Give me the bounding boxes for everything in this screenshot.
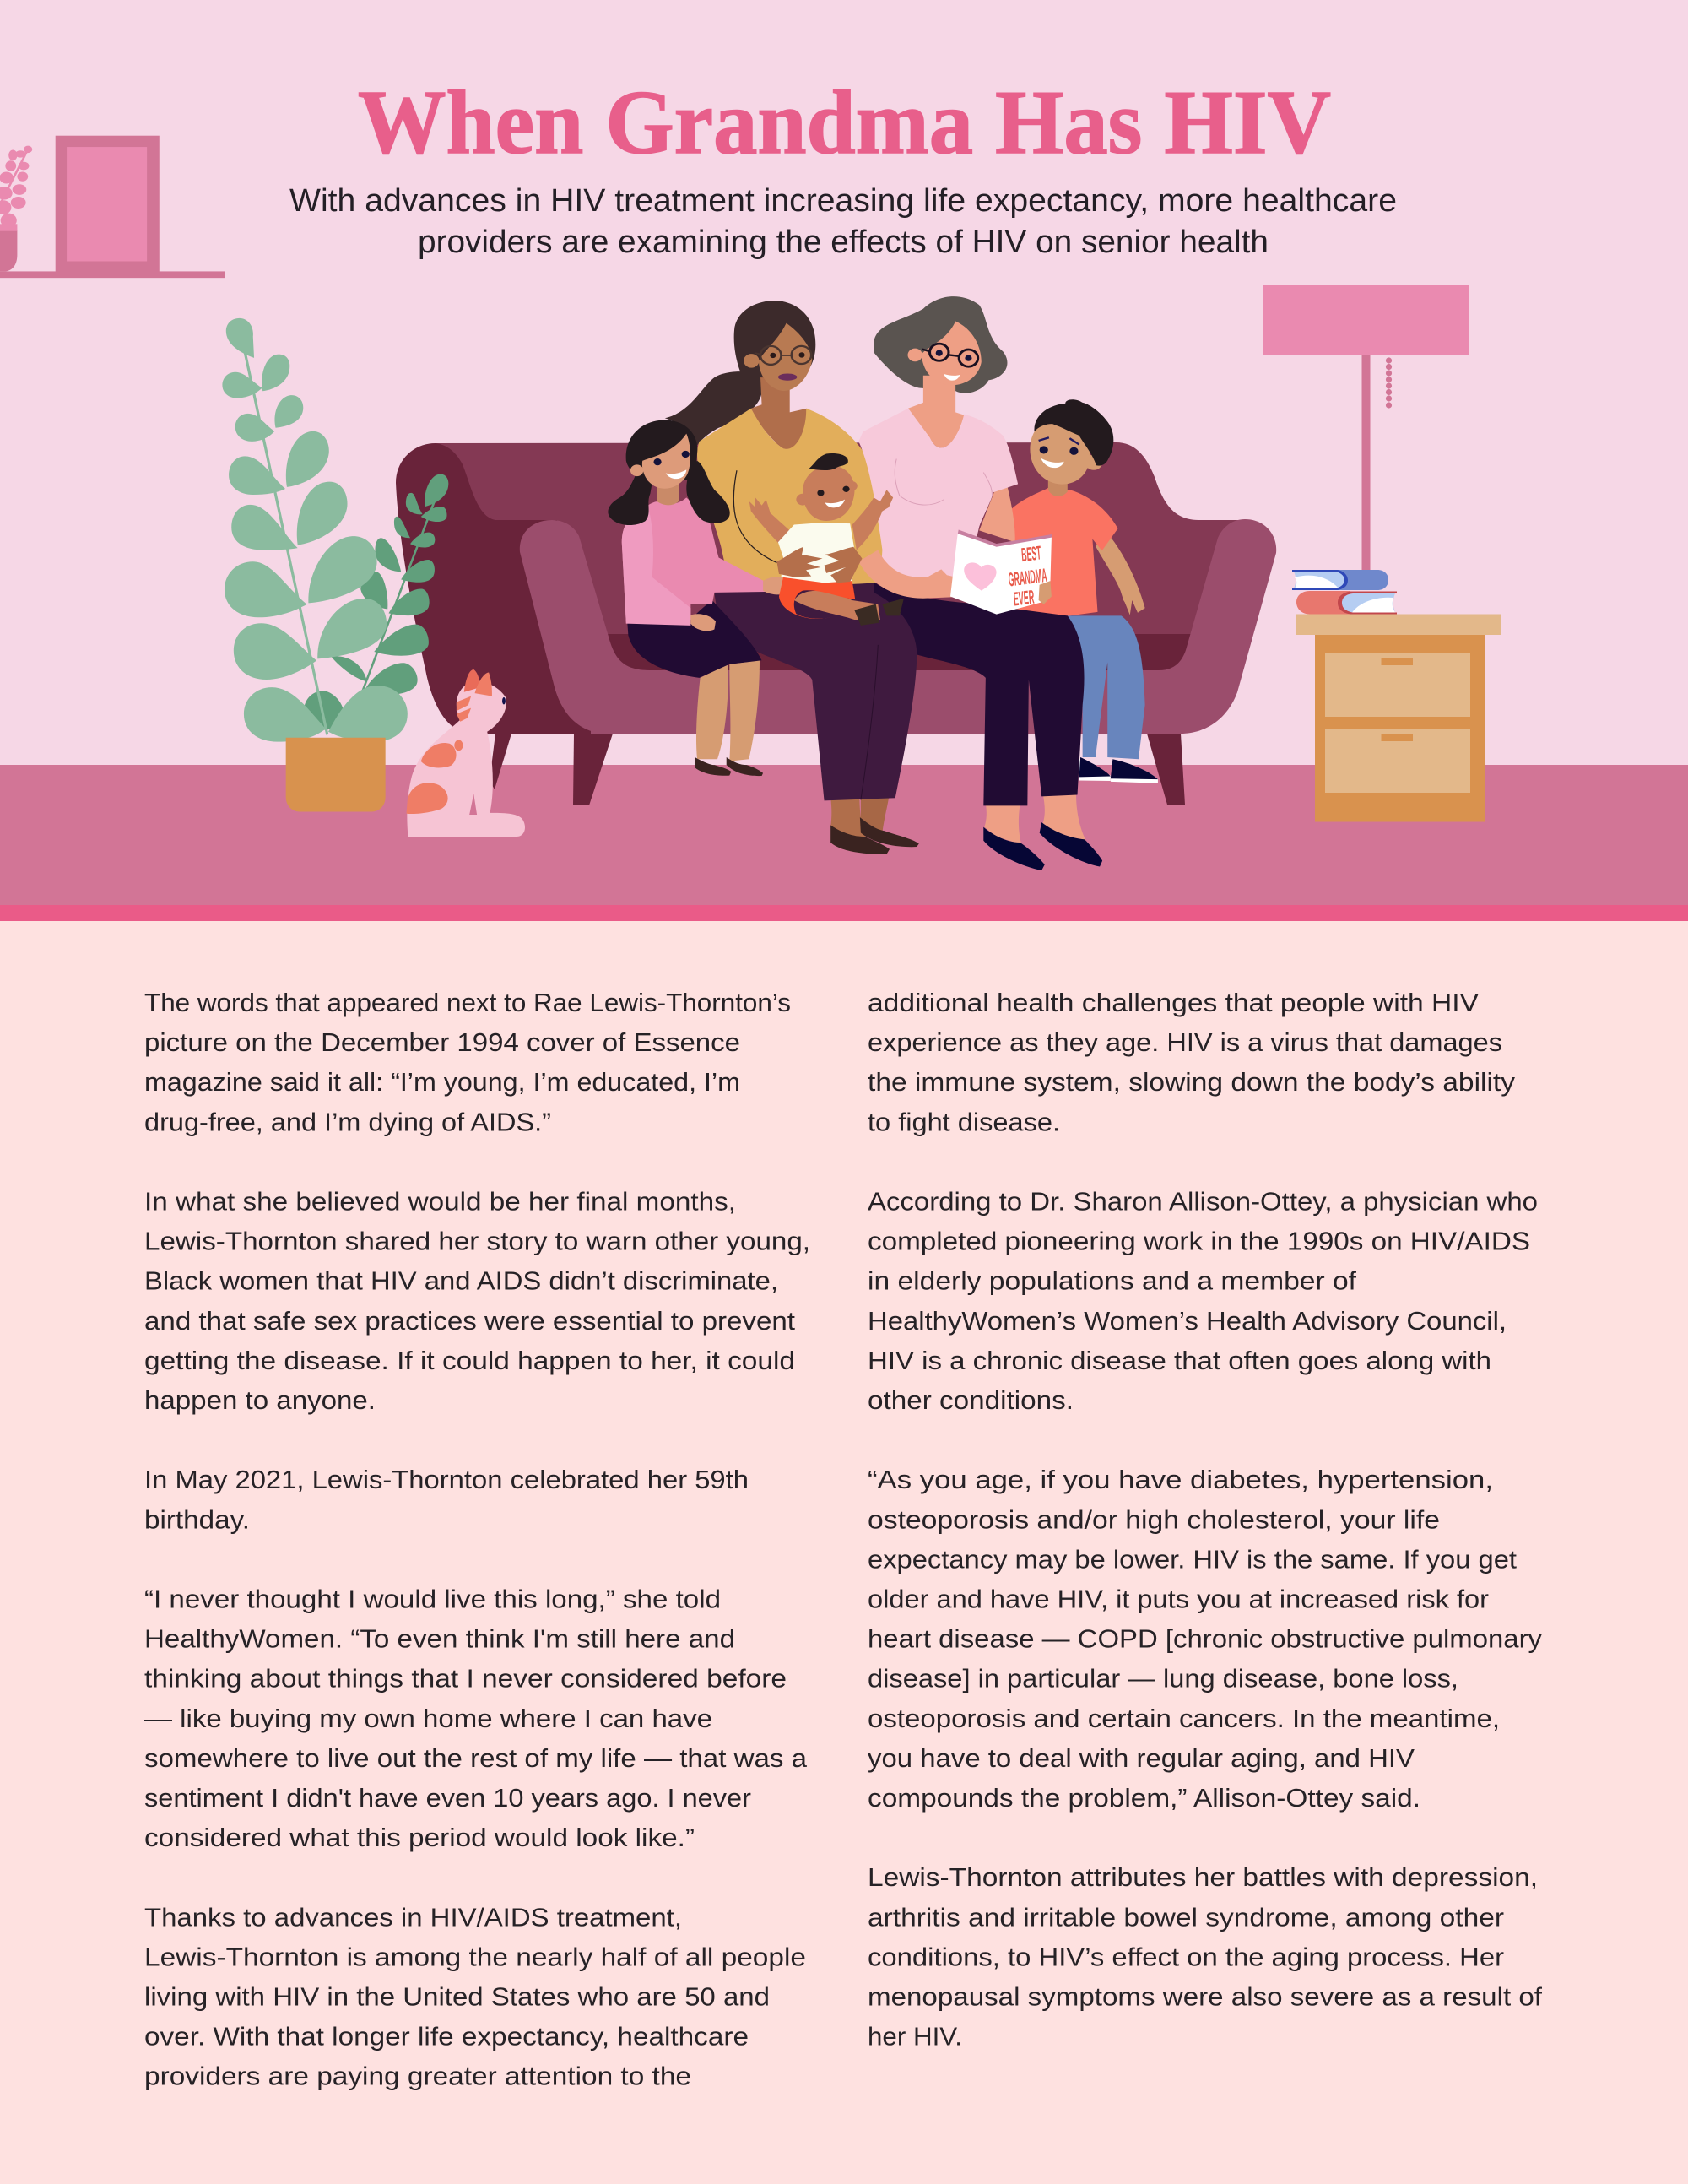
title: When Grandma Has HIV	[358, 73, 1331, 173]
paragraph 3: birthday.	[144, 1504, 250, 1534]
paragraph 4: “I never thought I would live this long,” she told	[144, 1584, 721, 1614]
panel: wall background	[0, 0, 1688, 765]
paragraph 8	[868, 1465, 1543, 1813]
paragraph 7: HIV is a chronic disease that often goes along with	[868, 1346, 1491, 1375]
paragraph 5: providers are paying greater attention to the	[144, 2062, 691, 2091]
paragraph 1: The words that appeared next to Rae Lewis-Thornton’s	[144, 988, 791, 1017]
paragraph 8: compounds the problem,” Allison-Ottey said.	[868, 1783, 1420, 1813]
paragraph 3	[144, 1465, 749, 1534]
illustration: wall shelf with frame and plant	[0, 136, 225, 278]
paragraph 8: “As you age, if you have diabetes, hypertension,	[868, 1465, 1493, 1494]
paragraph 8: osteoporosis and certain cancers. In the meantime,	[868, 1704, 1500, 1733]
paragraph 6: the immune system, slowing down the body’s ability	[868, 1067, 1516, 1097]
illustration: potted plant and cat	[222, 318, 525, 837]
paragraph 5: Lewis-Thornton is among the nearly half of all people	[144, 1942, 806, 1971]
paragraph 8: heart disease — COPD [chronic obstructive pulmonary	[868, 1624, 1543, 1654]
paragraph 4: somewhere to live out the rest of my life — that was a	[144, 1743, 808, 1773]
paragraph 4: thinking about things that I never considered before	[144, 1664, 787, 1694]
mother back hair	[665, 301, 815, 445]
accent band	[0, 905, 1688, 921]
paragraph 7: HealthyWomen’s Women’s Health Advisory Council,	[868, 1306, 1507, 1336]
illustration: floor lamp	[1263, 285, 1469, 572]
paragraph 9: conditions, to HIV’s effect on the aging process. Her	[868, 1942, 1504, 1971]
paragraph 2: happen to anyone.	[144, 1385, 376, 1415]
subtitle: With advances in HIV treatment increasing life expectancy, more healthcare	[289, 183, 1397, 219]
paragraph 8: disease] in particular — lung disease, bone loss,	[868, 1664, 1458, 1694]
cat	[407, 669, 525, 837]
paragraph 8: expectancy may be lower. HIV is the same. If you get	[868, 1544, 1517, 1574]
paragraph 4: sentiment I didn't have even 10 years ago. I never	[144, 1783, 751, 1813]
mother trousers and feet	[714, 583, 919, 854]
paragraph 9	[868, 1862, 1542, 2051]
mother face	[744, 323, 812, 449]
paragraph 2: and that safe sex practices were essential to prevent	[144, 1306, 795, 1336]
paragraph 4: HealthyWomen. “To even think I'm still here and	[144, 1624, 735, 1654]
paragraph 5	[144, 1902, 806, 2091]
girl	[608, 420, 792, 776]
mother sweater	[697, 409, 890, 593]
paragraph 6	[868, 988, 1516, 1136]
illustration: stacked books	[1292, 570, 1397, 615]
grandmother forearm	[858, 550, 970, 599]
grandmother shirt and arm	[858, 409, 1018, 588]
paragraph 1: magazine said it all: “I’m young, I’m educated, I’m	[144, 1067, 740, 1097]
paragraph 1: picture on the December 1994 cover of Essence	[144, 1027, 740, 1057]
paragraph 1	[144, 988, 791, 1136]
text block: left column	[144, 988, 810, 2091]
illustration: sofa	[396, 442, 1276, 805]
paragraph 7: According to Dr. Sharon Allison-Ottey, a physician who	[868, 1187, 1538, 1216]
paragraph 5: Thanks to advances in HIV/AIDS treatment,	[144, 1902, 682, 1932]
paragraph 9: Lewis-Thornton attributes her battles with depression,	[868, 1862, 1538, 1892]
paragraph 8: you have to deal with regular aging, and HIV	[868, 1743, 1415, 1773]
paragraph 7	[868, 1187, 1538, 1415]
grandmother head and neck	[908, 322, 982, 448]
greeting card	[950, 529, 1052, 615]
paragraph 1: drug-free, and I’m dying of AIDS.”	[144, 1107, 551, 1136]
grandmother hair	[874, 296, 1007, 393]
panel: floor	[0, 765, 1688, 905]
paragraph 2: In what she believed would be her final months,	[144, 1187, 736, 1216]
paragraph 3: In May 2021, Lewis-Thornton celebrated her 59th	[144, 1465, 749, 1494]
illustration: family on sofa	[608, 296, 1158, 870]
paragraph 4	[144, 1584, 808, 1852]
text block: right column	[868, 988, 1543, 2051]
paragraph 4: considered what this period would look like.”	[144, 1823, 695, 1852]
paragraph 6: additional health challenges that people with HIV	[868, 988, 1479, 1017]
paragraph 2: Lewis-Thornton shared her story to warn other young,	[144, 1227, 810, 1256]
paragraph 7: completed pioneering work in the 1990s on HIV/AIDS	[868, 1227, 1530, 1256]
paragraph 9: her HIV.	[868, 2022, 962, 2051]
paragraph 4: — like buying my own home where I can have	[144, 1704, 712, 1733]
grandmother trousers and feet	[874, 583, 1102, 870]
paragraph 6: experience as they age. HIV is a virus that damages	[868, 1027, 1502, 1057]
greeting card: EVER	[1012, 587, 1036, 610]
paragraph 5: over. With that longer life expectancy, healthcare	[144, 2022, 749, 2051]
boy	[1009, 399, 1158, 783]
paragraph 7: in elderly populations and a member of	[868, 1266, 1356, 1296]
paragraph 8: osteoporosis and/or high cholesterol, your life	[868, 1504, 1440, 1534]
paragraph 7: other conditions.	[868, 1385, 1074, 1415]
paragraph 6: to fight disease.	[868, 1107, 1060, 1136]
panel: article background	[0, 921, 1688, 2184]
paragraph 2: getting the disease. If it could happen to her, it could	[144, 1346, 795, 1375]
paragraph 8: older and have HIV, it puts you at increased risk for	[868, 1584, 1489, 1614]
illustration: family on sofa: GRANDMA	[1007, 565, 1048, 591]
plant pot	[286, 738, 386, 811]
subtitle	[289, 183, 1397, 260]
paragraph 9: arthritis and irritable bowel syndrome, among other	[868, 1902, 1504, 1932]
paragraph 5: living with HIV in the United States who are 50 and	[144, 1982, 770, 2011]
paragraph 9: menopausal symptoms were also severe as a result of	[868, 1982, 1542, 2011]
baby	[749, 453, 904, 626]
illustration: nightstand	[1296, 615, 1501, 822]
paragraph 2	[144, 1187, 810, 1415]
greeting card: BEST	[1020, 542, 1043, 566]
paragraph 2: Black women that HIV and AIDS didn’t discriminate,	[144, 1266, 778, 1296]
subtitle: providers are examining the effects of HIV on senior health	[418, 225, 1269, 260]
light plant	[222, 318, 408, 742]
dark plant	[305, 474, 448, 730]
